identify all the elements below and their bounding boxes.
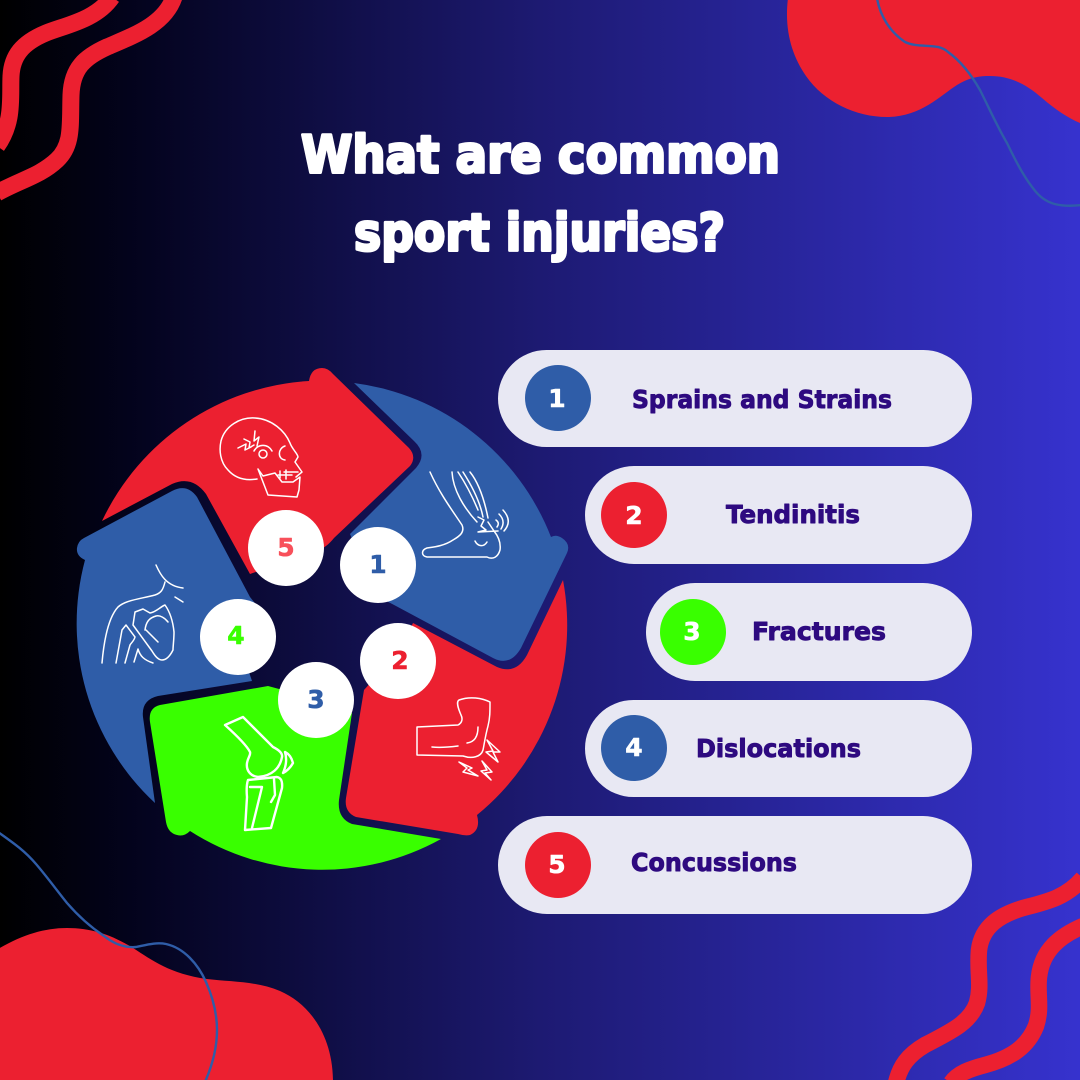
wheel number badge 1: 1 xyxy=(369,550,387,579)
list item 5: Concussions xyxy=(498,816,972,914)
wheel diagram xyxy=(77,368,568,870)
decoration: bottom-right waves xyxy=(896,878,1080,1080)
decoration: top-right blob xyxy=(787,0,1080,206)
list item 5: Concussions: Concussions xyxy=(631,848,797,877)
list item 1: Sprains and Strains xyxy=(498,350,972,447)
wheel segment 2: red xyxy=(346,580,567,835)
icon: elbow xyxy=(417,698,500,780)
icon: knee xyxy=(225,717,293,830)
icon: shoulder xyxy=(102,565,183,663)
wheel number badge 3: 3 xyxy=(307,685,325,714)
title: What are common xyxy=(301,126,780,186)
list item 4: Dislocations: Dislocations xyxy=(696,734,861,763)
wheel segment 5: red xyxy=(102,368,413,574)
wheel number badge 2 xyxy=(360,623,436,699)
title xyxy=(301,126,780,264)
list item 2: Tendinitis: Tendinitis xyxy=(726,500,860,529)
title: sport injuries? xyxy=(354,204,725,264)
list item 5: Concussions: 5 xyxy=(548,850,566,879)
list item 1: Sprains and Strains: Sprains and Strains xyxy=(632,385,892,414)
wheel number badge 2: 2 xyxy=(391,646,409,675)
list item 2: Tendinitis: 2 xyxy=(625,501,643,530)
wheel number badge 4 xyxy=(200,599,276,675)
list item 4: Dislocations xyxy=(585,700,972,797)
wheel segment 1: blue xyxy=(350,383,568,661)
list item 3: Fractures: 3 xyxy=(683,617,701,646)
list item 2: Tendinitis xyxy=(585,466,972,564)
wheel segment 3: green xyxy=(150,686,441,870)
wheel segment 4: blue xyxy=(77,488,262,803)
decoration: top-left waves xyxy=(0,0,174,193)
wheel number badge 1 xyxy=(340,527,416,603)
icon: ankle xyxy=(422,472,508,558)
list item 1: Sprains and Strains: 1 xyxy=(548,384,566,413)
icon: skull xyxy=(220,418,302,497)
wheel number badge 4: 4 xyxy=(227,621,245,650)
wheel number badge 5 xyxy=(248,510,324,586)
wheel number badge 3 xyxy=(278,662,354,738)
wheel number badge 5: 5 xyxy=(277,533,295,562)
list item 4: Dislocations: 4 xyxy=(625,733,643,762)
decoration: bottom-left blob xyxy=(0,832,333,1080)
list item 3: Fractures xyxy=(646,583,972,681)
list item 3: Fractures: Fractures xyxy=(752,617,886,646)
